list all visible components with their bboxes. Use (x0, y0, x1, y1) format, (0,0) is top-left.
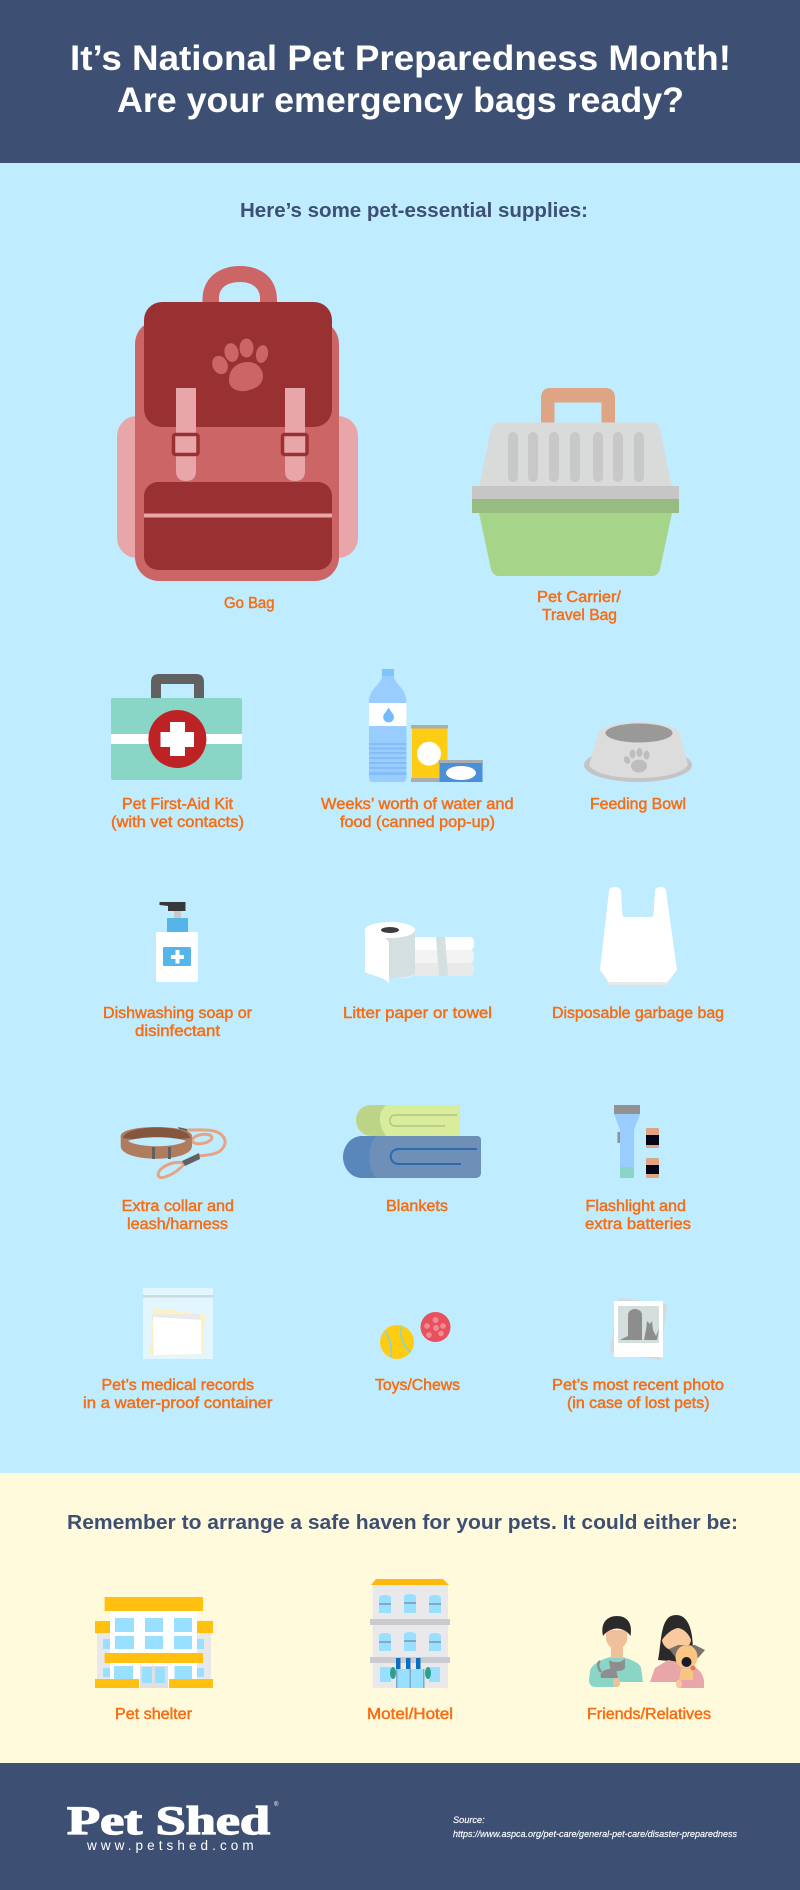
icon: collar and leash (121, 1127, 225, 1178)
title: Are your emergency bags ready? (117, 81, 684, 120)
label: water and food: food (canned pop-up) (340, 814, 495, 831)
panel: footer (0, 1763, 800, 1890)
icon: water and canned food (369, 669, 483, 782)
icon: garbage bag (600, 887, 677, 985)
icon: friends and relatives with pets (589, 1615, 705, 1688)
label: pet carrier: Pet Carrier/ (537, 589, 622, 606)
label: friends/relatives: Friends/Relatives (587, 1706, 711, 1723)
label: garbage bag: Disposable garbage bag (552, 1005, 724, 1022)
label: flashlight: Flashlight and (586, 1198, 686, 1215)
label: litter paper: Litter paper or towel (343, 1005, 492, 1022)
man with cat (589, 1616, 643, 1687)
icon: pet shelter building (95, 1597, 213, 1688)
icon: blankets (343, 1105, 481, 1178)
icon: paper roll and towels (365, 922, 474, 983)
logo: Pet Shed (67, 1798, 279, 1853)
logo: Pet Shed: www.petshed.com (86, 1838, 254, 1853)
woman with dog (650, 1615, 705, 1688)
icon: go bag backpack (117, 266, 358, 581)
label: pet carrier: Travel Bag (542, 607, 617, 624)
label: first-aid kit: (with vet contacts) (111, 814, 244, 831)
source text (453, 1815, 737, 1839)
title: It’s National Pet Preparedness Month! (70, 39, 731, 78)
icon: pet photo (610, 1298, 667, 1360)
icon: pet carrier (472, 388, 679, 576)
label: first-aid kit: Pet First-Aid Kit (122, 796, 234, 813)
icon: soap bottle (156, 902, 198, 982)
icon: motel/hotel building (370, 1579, 450, 1688)
label: collar and leash (122, 1198, 234, 1233)
label: collar and leash: leash/harness (127, 1216, 228, 1233)
label: go bag: Go Bag (224, 595, 274, 612)
label: collar and leash: Extra collar and (122, 1198, 234, 1215)
label: soap (103, 1005, 252, 1040)
heading: safe haven: Remember to arrange a safe haven for your pets. It could either be: (67, 1511, 738, 1534)
label: pet carrier (537, 589, 622, 624)
label: pet photo: (in case of lost pets) (567, 1395, 710, 1412)
icon: feeding bowl (584, 722, 692, 782)
label: toys: Toys/Chews (375, 1377, 460, 1394)
label: medical records: Pet’s medical records (102, 1377, 254, 1394)
icon: medical records bag (143, 1288, 213, 1359)
label: soap: disinfectant (135, 1023, 221, 1040)
label: pet shelter: Pet shelter (115, 1706, 192, 1723)
label: medical records (83, 1377, 272, 1412)
label: water and food: Weeks’ worth of water and (321, 796, 514, 813)
source text: https://www.aspca.org/pet-care/general-pet-care/disaster-preparedness (453, 1829, 737, 1839)
label: pet photo (552, 1377, 724, 1412)
icon: flashlight and batteries (614, 1105, 659, 1178)
icon: toys (380, 1312, 450, 1359)
logo: Pet Shed: Pet Shed (67, 1798, 270, 1843)
label: pet photo: Pet’s most recent photo (552, 1377, 724, 1394)
panel: header (0, 0, 800, 163)
label: motel/hotel: Motel/Hotel (367, 1706, 453, 1723)
label: flashlight: extra batteries (585, 1216, 691, 1233)
panel: safe haven (0, 1473, 800, 1763)
heading: supplies: Here’s some pet-essential supplies: (240, 200, 588, 222)
label: blankets: Blankets (386, 1198, 448, 1215)
icon: first-aid kit (111, 674, 242, 780)
label: soap: Dishwashing soap or (103, 1005, 252, 1022)
label: feeding bowl: Feeding Bowl (590, 796, 686, 813)
label: medical records: in a water-proof container (83, 1395, 272, 1412)
title (70, 39, 731, 120)
logo: Pet Shed: ® (274, 1801, 279, 1808)
label: flashlight (585, 1198, 691, 1233)
source text: Source: (453, 1815, 485, 1825)
label: water and food (321, 796, 514, 831)
label: first-aid kit (111, 796, 244, 831)
